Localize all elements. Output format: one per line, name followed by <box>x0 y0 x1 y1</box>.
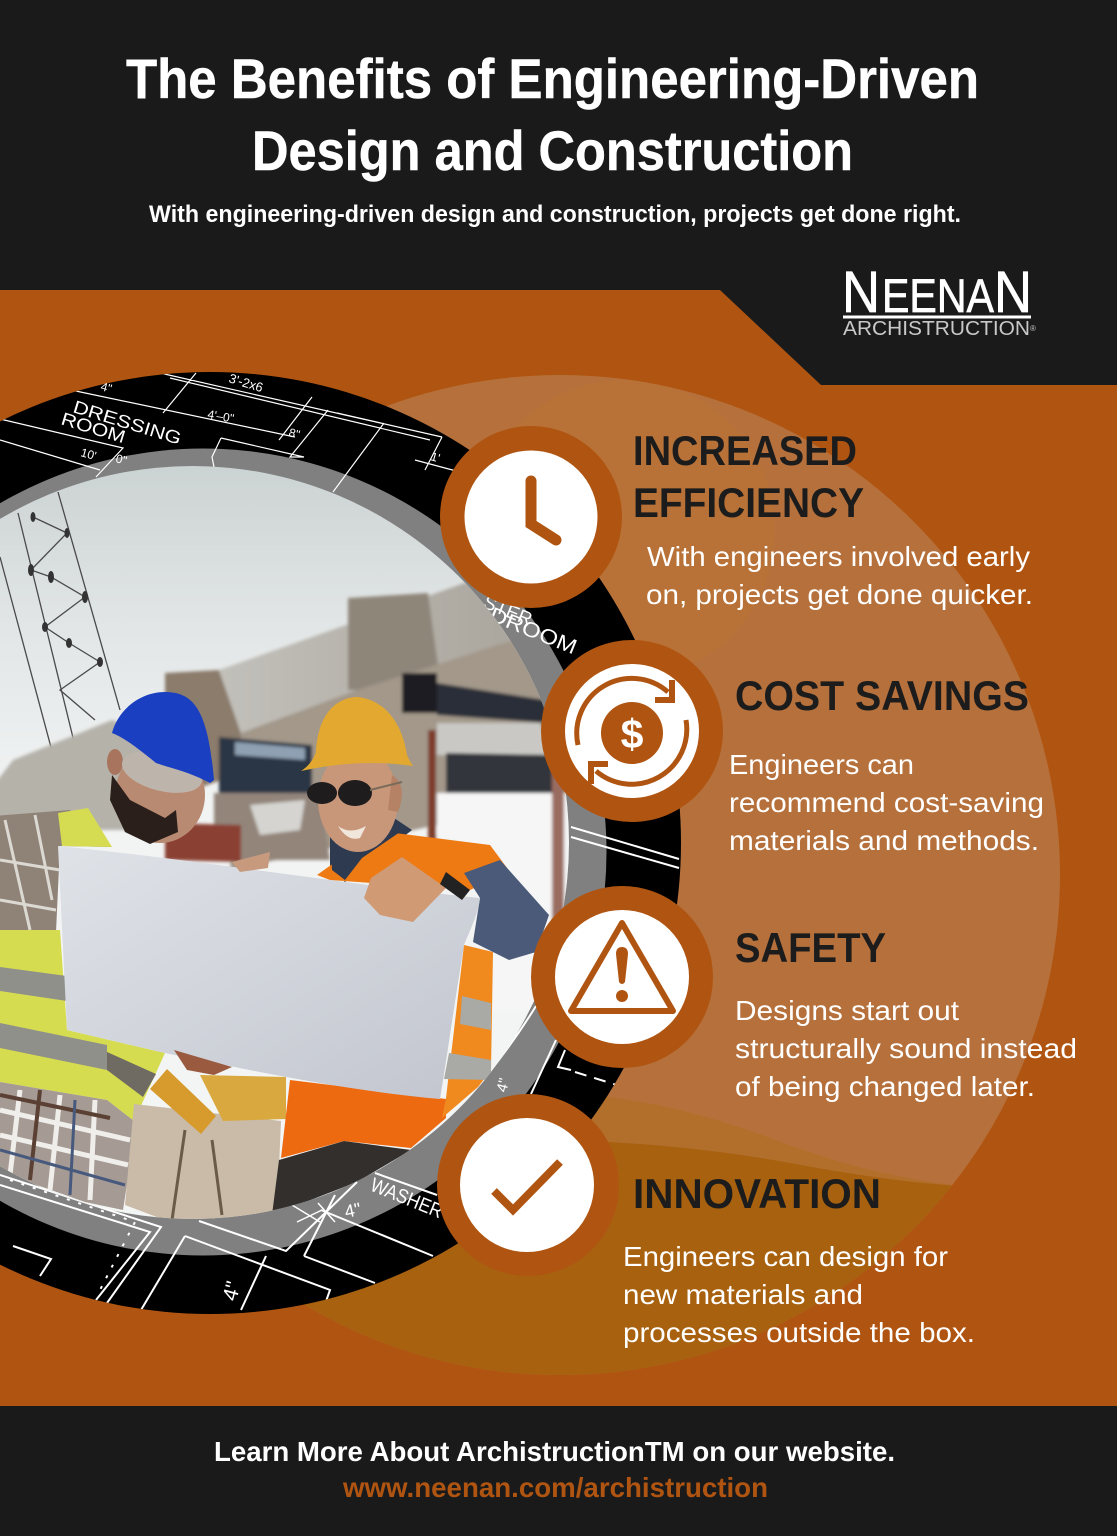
logo: Neenan Archistruction: N <box>842 260 880 325</box>
left man lower plaid shirt <box>0 1082 134 1210</box>
blueprint labels: 4" <box>493 1076 513 1094</box>
panel: innovation <box>437 1094 975 1348</box>
right man torso and sleeve <box>330 812 412 882</box>
blueprint labels: 4" <box>219 1279 246 1303</box>
logo: Neenan Archistruction: ® <box>1030 324 1036 333</box>
body text: of being changed later. <box>735 1071 1035 1102</box>
right man lower vest and trousers <box>272 1141 411 1215</box>
blueprint labels: 10' <box>79 445 98 463</box>
blueprint labels: 8" <box>287 425 301 442</box>
blueprint labels <box>59 371 580 1303</box>
title: The Benefits of Engineering-Driven <box>126 47 979 110</box>
heading: SAFETY <box>735 924 886 971</box>
heading: INNOVATION <box>633 1170 881 1217</box>
blueprint labels: DROOM <box>486 603 580 659</box>
blueprint ring <box>0 371 681 1314</box>
orange main panel <box>0 290 1117 1406</box>
crane lattice <box>0 492 121 748</box>
logo: Neenan Archistruction: N <box>994 260 1032 325</box>
blueprint labels: WASHER <box>367 1174 446 1223</box>
left man head and hat <box>107 692 214 844</box>
body text <box>646 541 1033 610</box>
title <box>126 47 979 182</box>
sack and tools <box>125 1104 281 1222</box>
body text: processes outside the box. <box>623 1317 975 1348</box>
icon: dollar cycle: $ <box>621 711 644 757</box>
logo: Neenan Archistruction <box>842 260 1036 340</box>
blueprint labels: STER <box>480 592 535 631</box>
blueprint line drawing <box>0 373 679 1310</box>
blueprint labels: 1' <box>429 449 442 465</box>
right man head and hat <box>301 697 413 852</box>
body text: on, projects get done quicker. <box>646 579 1033 610</box>
pale background circle with wave overlays <box>304 375 1060 1375</box>
body text: Engineers can <box>729 749 914 780</box>
logo: Neenan Archistruction: EENA <box>882 269 995 322</box>
heading: INCREASED <box>633 427 857 474</box>
footer url: www.neenan.com/archistruction <box>342 1472 768 1503</box>
body text <box>623 1241 975 1348</box>
icon: warning triangle <box>531 886 713 1068</box>
panel: increased efficiency <box>440 426 1033 610</box>
blueprint labels: 4'–0" <box>206 407 235 426</box>
body text: With engineers involved early <box>647 541 1030 572</box>
heading: EFFICIENCY <box>633 479 864 526</box>
icon: dollar cycle <box>541 640 723 822</box>
logo: Neenan Archistruction: ARCHISTRUCTION <box>843 318 1030 340</box>
blueprint labels: 0" <box>114 451 128 468</box>
blueprint sheet <box>58 846 480 1099</box>
footer band <box>0 1406 1117 1536</box>
panel: safety <box>531 886 1077 1102</box>
body text: recommend cost-saving <box>729 787 1044 818</box>
title: Design and Construction <box>252 119 853 182</box>
blueprint labels: 4" <box>343 1199 363 1222</box>
body text: Designs start out <box>735 995 959 1026</box>
body text: new materials and <box>623 1279 863 1310</box>
footer call to action: Learn More About ArchistructionTM on our website. <box>214 1436 895 1467</box>
left man plaid arm and vest <box>0 810 112 932</box>
icon: check mark <box>437 1094 619 1276</box>
heading: COST SAVINGS <box>735 672 1029 719</box>
body text: Engineers can design for <box>623 1241 948 1272</box>
hands <box>364 857 446 922</box>
blueprint labels: 3'-2x6 <box>227 371 265 395</box>
body text: materials and methods. <box>729 825 1039 856</box>
body text <box>729 749 1044 856</box>
blueprint labels: 4" <box>99 379 113 396</box>
photo: engineers reading blueprint <box>0 460 580 1230</box>
blueprint labels: ROOM <box>59 409 128 447</box>
body text: structurally sound instead <box>735 1033 1077 1064</box>
blueprint labels: DRESSING <box>71 397 184 449</box>
body text <box>735 995 1077 1102</box>
subtitle: With engineering-driven design and construction, projects get done right. <box>149 201 961 228</box>
icon: clock <box>440 426 622 608</box>
steel beams and scaffold background <box>0 580 575 1010</box>
heading <box>633 427 864 526</box>
panel: cost savings <box>541 640 1044 856</box>
